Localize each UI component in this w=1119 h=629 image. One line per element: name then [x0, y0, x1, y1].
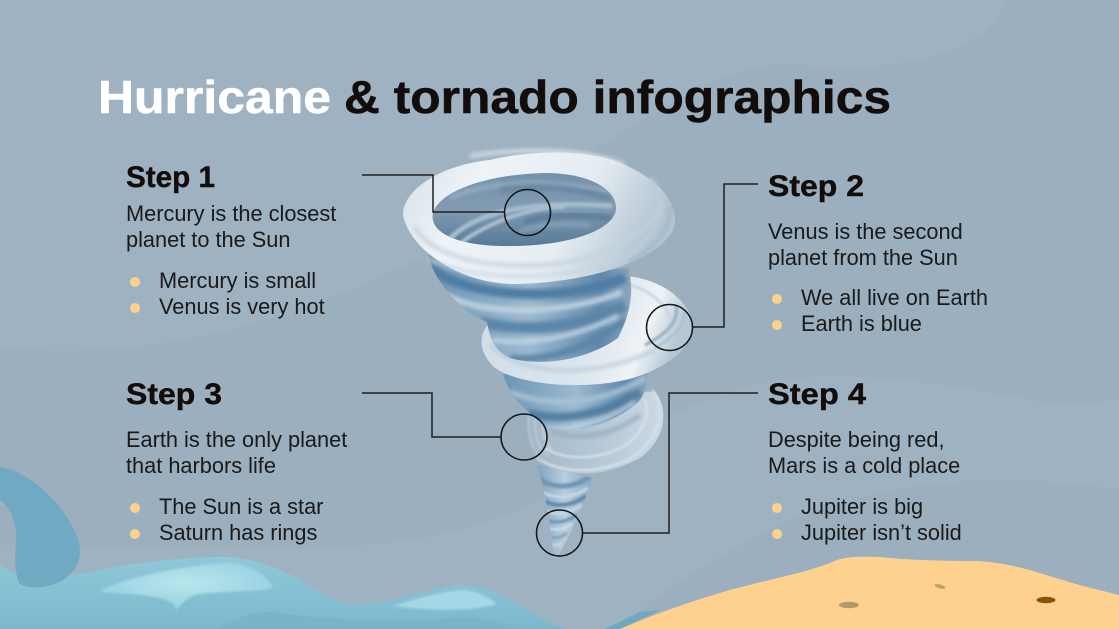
- description: Mars is a cold place: [768, 453, 960, 478]
- upper body: [428, 255, 631, 362]
- panel: step 3: [126, 378, 347, 545]
- tornado illustration: [403, 151, 693, 558]
- middle body: [503, 373, 648, 430]
- bullet list: [772, 494, 962, 545]
- far water sliver: [605, 610, 660, 629]
- pebble: [934, 583, 946, 590]
- pebble: [839, 602, 859, 608]
- lower wave shade: [219, 612, 523, 629]
- bullet list: We all live on Earth: [801, 285, 988, 310]
- sand dune: [620, 557, 1119, 629]
- description: Venus is the second: [768, 219, 963, 244]
- lower cone: [537, 465, 592, 558]
- bullet list: [772, 285, 988, 336]
- description: Despite being red,: [768, 427, 945, 452]
- heading: Step 3: [126, 378, 222, 411]
- bullet list: Saturn has rings: [159, 520, 318, 545]
- connector: step 1: [362, 175, 550, 236]
- third ring: [528, 390, 663, 474]
- heading: Step 1: [126, 161, 215, 194]
- bullet list: [130, 494, 323, 545]
- connector: step 2: [646, 184, 758, 350]
- description: Mercury is the closest: [126, 201, 336, 226]
- bullet list: [130, 268, 325, 319]
- top ring: [403, 151, 675, 284]
- bullet list: Earth is blue: [801, 311, 922, 336]
- description: Earth is the only planet: [126, 427, 347, 452]
- title: [98, 71, 891, 123]
- panel: step 2: [768, 170, 988, 336]
- bullet list: Mercury is small: [159, 268, 316, 293]
- description: planet from the Sun: [768, 245, 958, 270]
- panel: step 4: [768, 378, 962, 545]
- curling wave crest: [0, 467, 80, 587]
- bullet list: Jupiter isn’t solid: [801, 520, 962, 545]
- tornado mouth: [433, 173, 616, 250]
- description: that harbors life: [126, 453, 276, 478]
- heading: Step 4: [768, 378, 866, 411]
- panel: step 1: [126, 161, 336, 319]
- foam highlight: [101, 563, 273, 612]
- bullet list: Venus is very hot: [159, 294, 325, 319]
- description: planet to the Sun: [126, 227, 290, 252]
- pebble: [1036, 597, 1056, 603]
- title: & tornado infographics: [344, 71, 891, 123]
- title: Hurricane: [98, 71, 331, 123]
- second ring: [482, 276, 693, 385]
- water body: [0, 557, 565, 629]
- bullet list: The Sun is a star: [159, 494, 323, 519]
- heading: Step 2: [768, 170, 864, 203]
- foam highlight right: [392, 590, 497, 610]
- bullet list: Jupiter is big: [801, 494, 923, 519]
- connector: step 4: [536, 393, 758, 556]
- bottom left wave: [0, 467, 660, 629]
- connector: step 3: [362, 393, 547, 460]
